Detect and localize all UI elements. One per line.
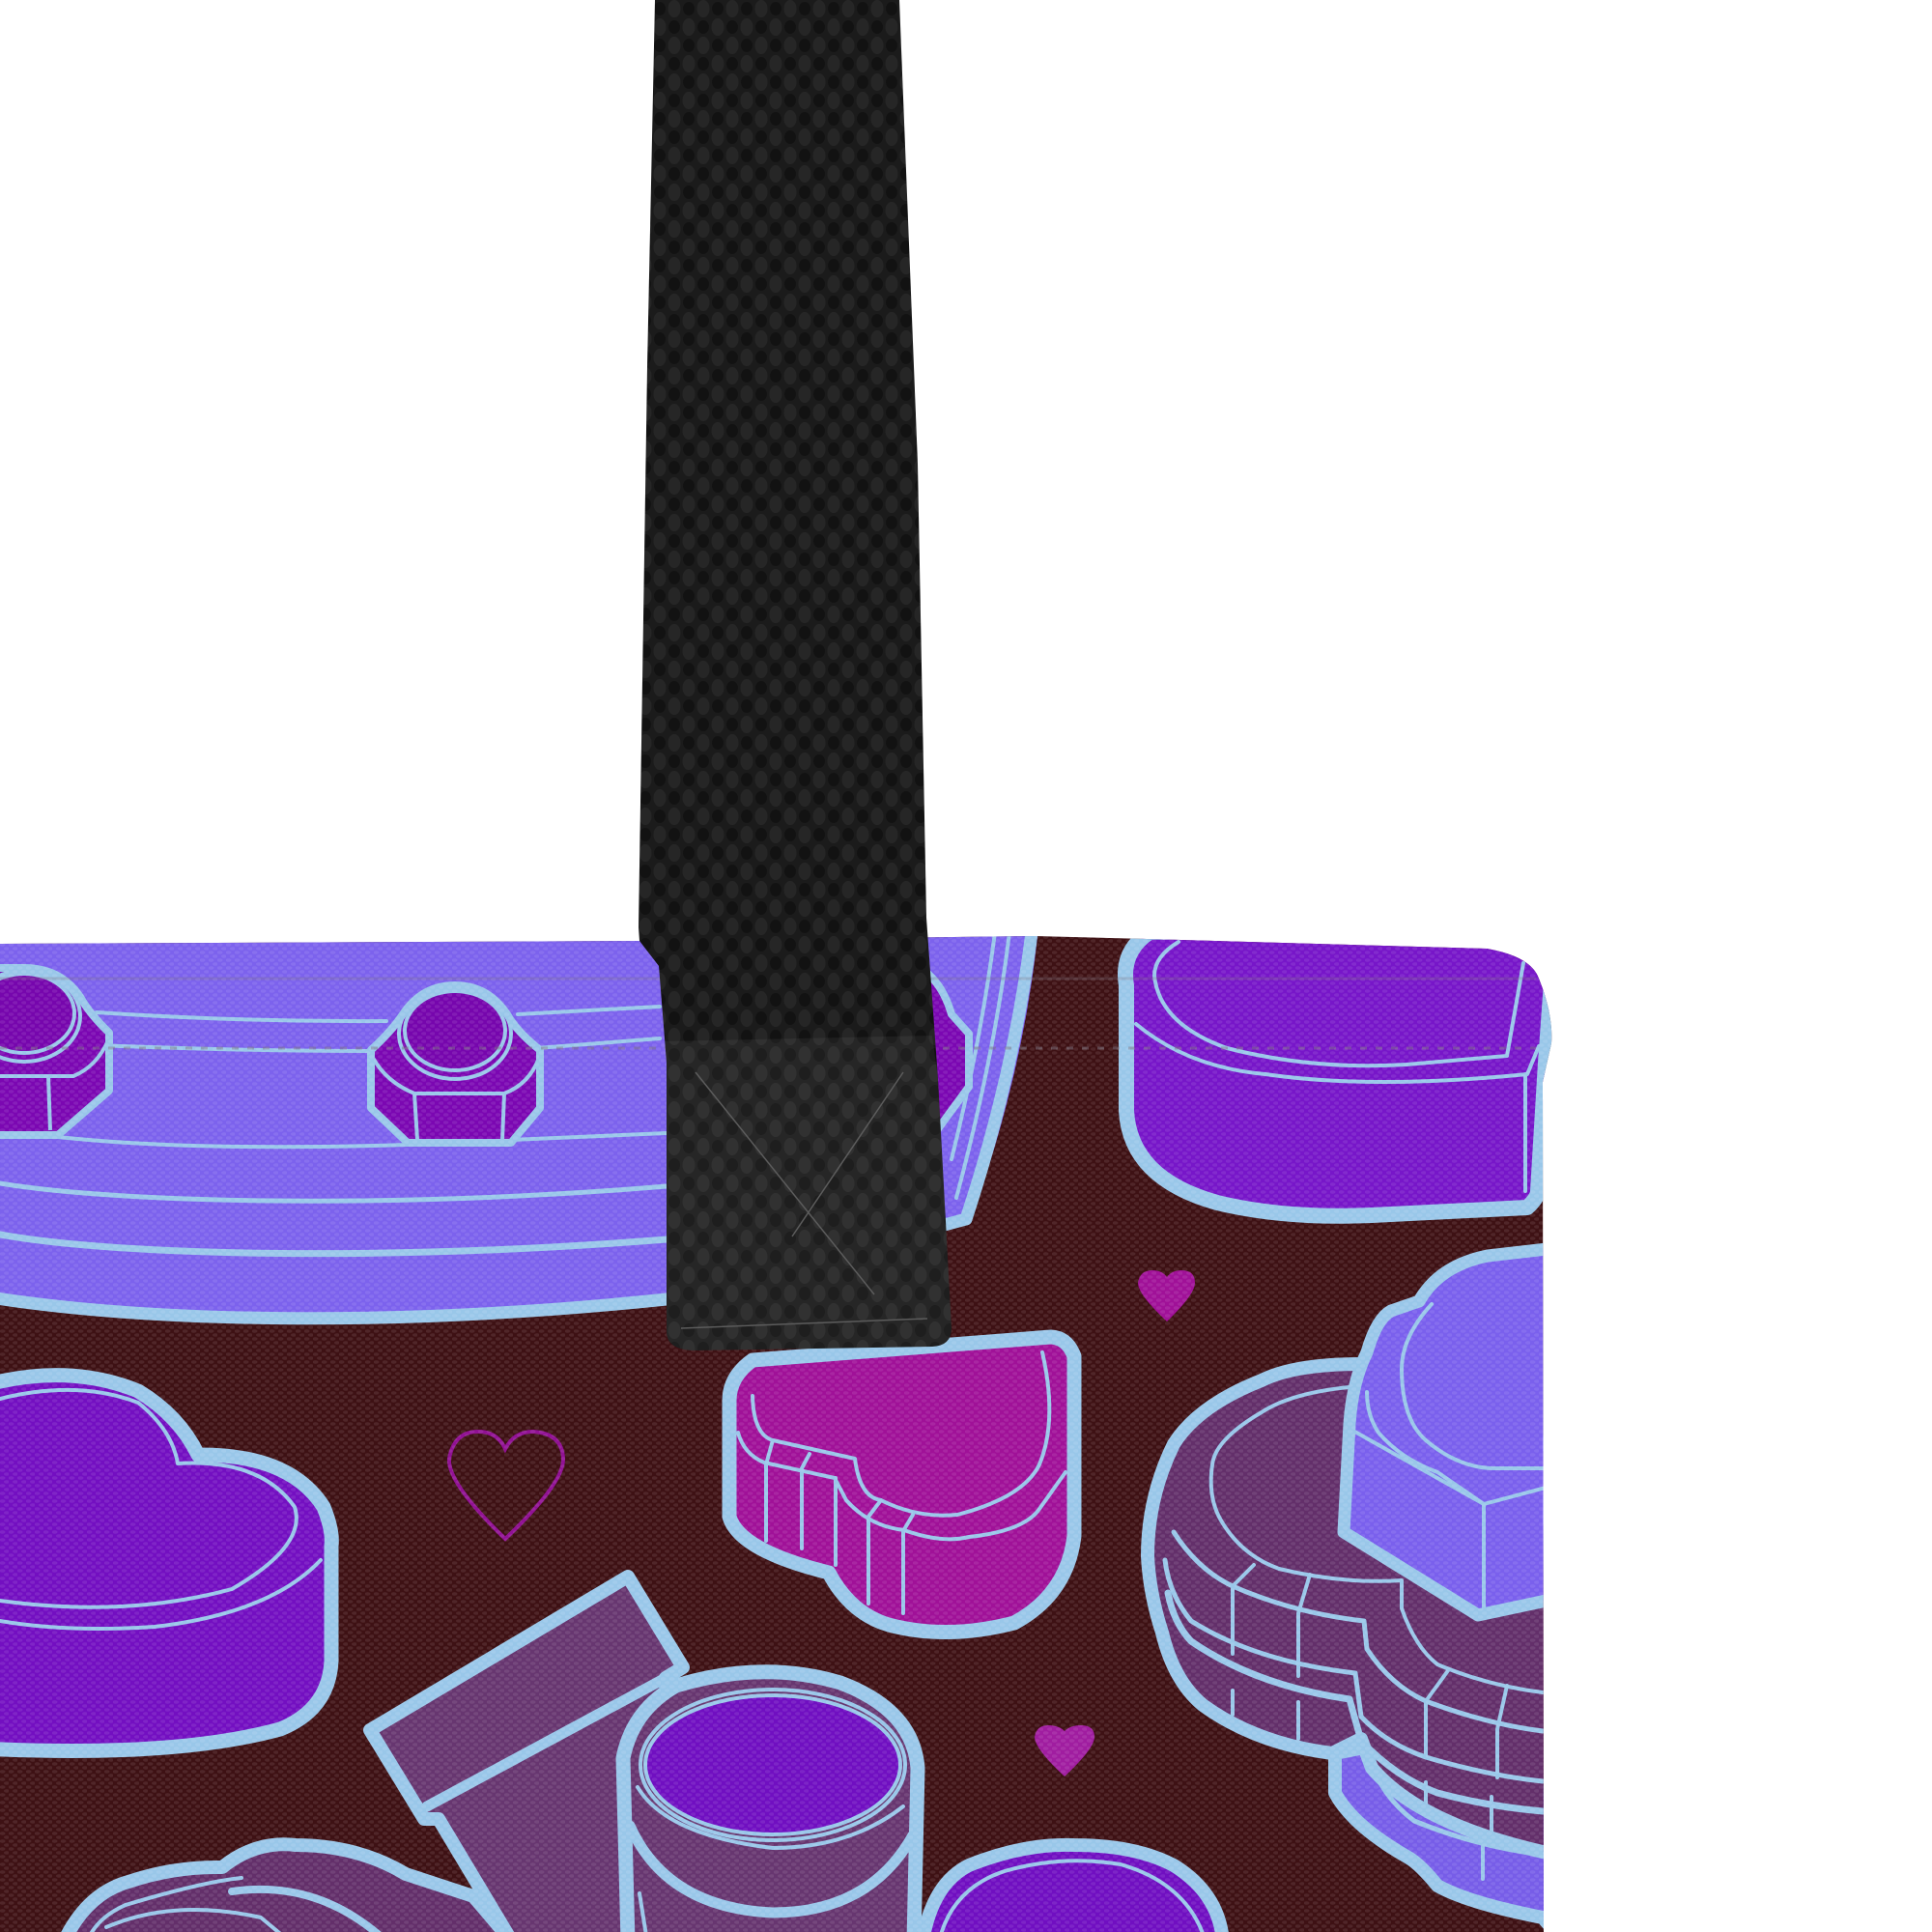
purple disk, bottom centre [923,1845,1223,1932]
small filled heart, lower [1035,1725,1094,1776]
translucent heart, bottom left [64,1844,512,1932]
tilted rectangular tag [370,1577,683,1932]
tote bag body [0,918,1594,1932]
big purple heart box, left [0,1376,331,1750]
stacked translucent disks, right [1148,1364,1555,1932]
fabric weave texture [0,918,1594,1932]
seam stitching [0,979,1536,1048]
large lavender bowl with nuts [0,927,1038,1319]
cylinder with purple top [623,1672,918,1932]
strap stitching [681,1072,927,1328]
nut right, partly behind strap [929,970,973,1132]
magenta heart box [729,1337,1074,1633]
lavender hex box on stack [1344,1248,1555,1615]
nut left [0,968,109,1135]
black woven strap [639,0,952,1350]
purple rounded box, top right [1125,927,1555,1216]
nut centre [371,985,540,1143]
small filled heart, upper [1138,1270,1195,1321]
outlined heart [449,1432,563,1539]
strap lower fold, slightly lighter [661,1036,952,1350]
